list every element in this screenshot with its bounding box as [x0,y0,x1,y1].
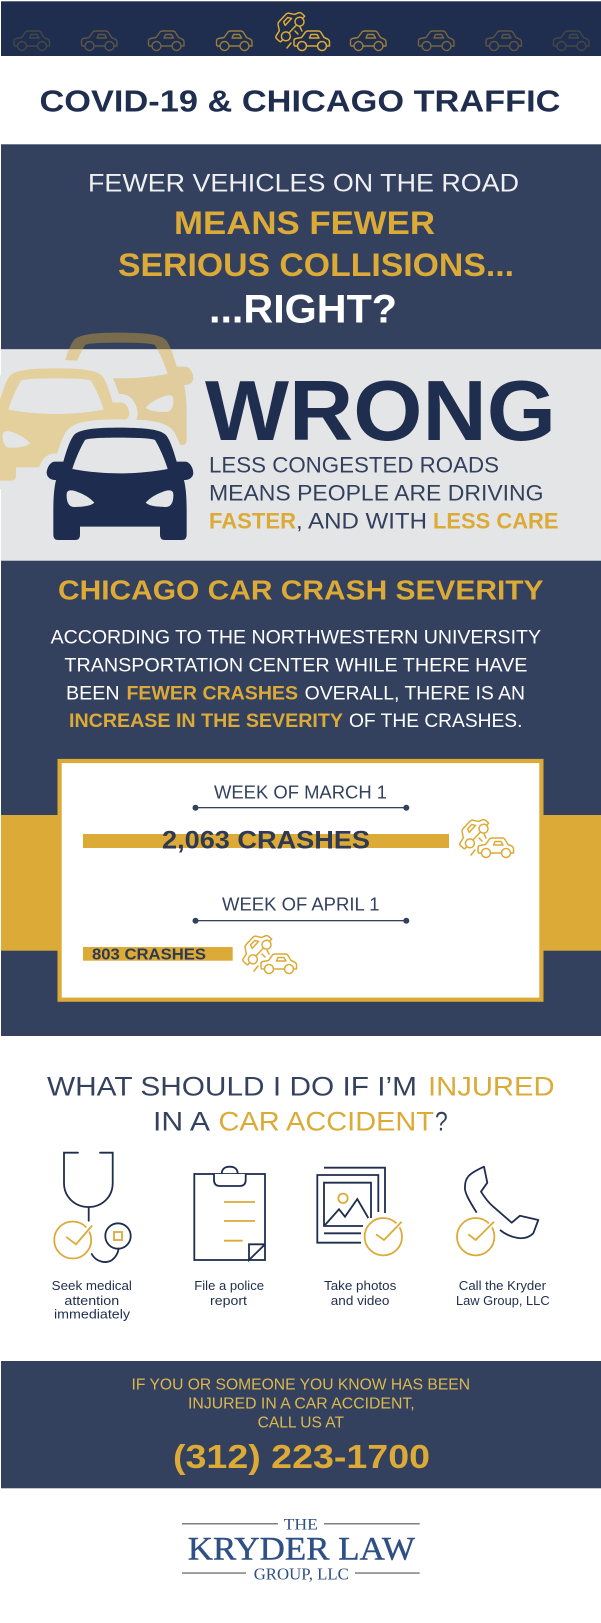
gold band [1,815,601,951]
icon: crash april [236,929,296,974]
bar: march [83,834,449,848]
text: call us: CALL US AT [258,1414,344,1431]
top banner with cars [1,1,601,56]
icon: crash march [453,813,514,858]
icon: row of faded cars [14,31,589,50]
text: faster and less care: LESS CARE [433,509,558,534]
label: week of march 1: WEEK OF MARCH 1 [214,781,387,802]
divider: march [192,805,409,811]
label: take photos and video: and video [331,1293,389,1308]
label: seek medical attention: attention [64,1293,119,1308]
text: call us [132,1376,470,1431]
panel: crash severity [1,561,601,1036]
panel: question [1,144,601,349]
label: seek medical attention [52,1278,132,1321]
chart card [60,761,541,1000]
text block: northwestern study: OF THE CRASHES. [349,711,522,732]
heading: what should i do: IN A [153,1107,210,1137]
text block: northwestern study: TRANSPORTATION CENTER WHILE THERE HAVE [64,655,528,676]
logo: the kryder law group: KRYDER LAW [188,1531,416,1567]
value: 803 crashes: 803 CRASHES [92,947,206,964]
heading: what should i do: ? [435,1107,448,1137]
text block: northwestern study: FEWER CRASHES [126,683,298,704]
label: call the kryder law group [456,1278,550,1308]
text: wrong: WRONG [205,364,556,459]
logo: the kryder law group: THE [284,1516,318,1533]
text: right: ...RIGHT? [209,288,397,332]
icon: phone [457,1167,538,1255]
label: take photos and video [324,1278,396,1308]
heading: what should i do: CAR ACCIDENT [218,1107,434,1137]
icon: car crash [269,6,330,50]
label: seek medical attention: immediately [54,1306,131,1321]
label: call the kryder law group: Law Group, LLC [456,1293,550,1308]
heading: what should i do: WHAT SHOULD I DO IF I’M [47,1071,417,1101]
text: means fewer: MEANS FEWER [174,205,435,241]
logo: the kryder law group: GROUP, LLC [254,1564,349,1583]
text block: northwestern study [51,627,541,732]
label: file a police report [194,1278,264,1308]
label: take photos and video: Take photos [324,1278,396,1293]
icon: clipboard [194,1167,265,1260]
icon: photos [317,1168,402,1255]
panel: wrong [0,333,601,561]
text: means people: MEANS PEOPLE ARE DRIVING [209,481,544,506]
label: file a police report: File a police [194,1278,264,1293]
text: faster and less care: FASTER [209,509,296,534]
heading: what should i do: INJURED [428,1071,555,1101]
title: COVID-19 & CHICAGO TRAFFIC [40,84,560,119]
text: faster and less care [209,509,558,534]
text block: northwestern study: ACCORDING TO THE NORTHWESTERN UNIVERSITY [51,627,541,648]
bar: april [83,947,233,961]
text: fewer vehicles: FEWER VEHICLES ON THE ROAD [88,170,519,198]
phone number: (312) 223-1700 [173,1438,430,1475]
text block: northwestern study: INCREASE IN THE SEVERITY [69,711,343,732]
text: serious collisions: SERIOUS COLLISIONS... [118,247,514,283]
logo: the kryder law group [182,1516,420,1583]
label: call the kryder law group: Call the Kryder [459,1278,547,1293]
text: less congested roads: LESS CONGESTED ROADS [209,453,499,478]
heading: chicago car crash severity: CHICAGO CAR CRASH SEVERITY [58,574,544,605]
text block: northwestern study: OVERALL, THERE IS AN [305,683,525,704]
value: 2,063 crashes: 2,063 CRASHES [162,826,370,854]
panel: call to action [1,1361,601,1488]
text: call us: INJURED IN A CAR ACCIDENT, [188,1395,415,1412]
label: week of april 1: WEEK OF APRIL 1 [222,893,380,914]
text: faster and less care: , AND WITH [296,509,427,534]
divider: april [192,918,409,924]
label: file a police report: report [210,1293,247,1308]
text: call us: IF YOU OR SOMEONE YOU KNOW HAS BEEN [132,1376,470,1393]
text block: northwestern study: BEEN [66,683,120,704]
label: seek medical attention: Seek medical [52,1278,132,1293]
heading: what should i do [47,1071,555,1137]
icon: stethoscope [54,1153,131,1262]
icon: three cars [0,333,193,540]
